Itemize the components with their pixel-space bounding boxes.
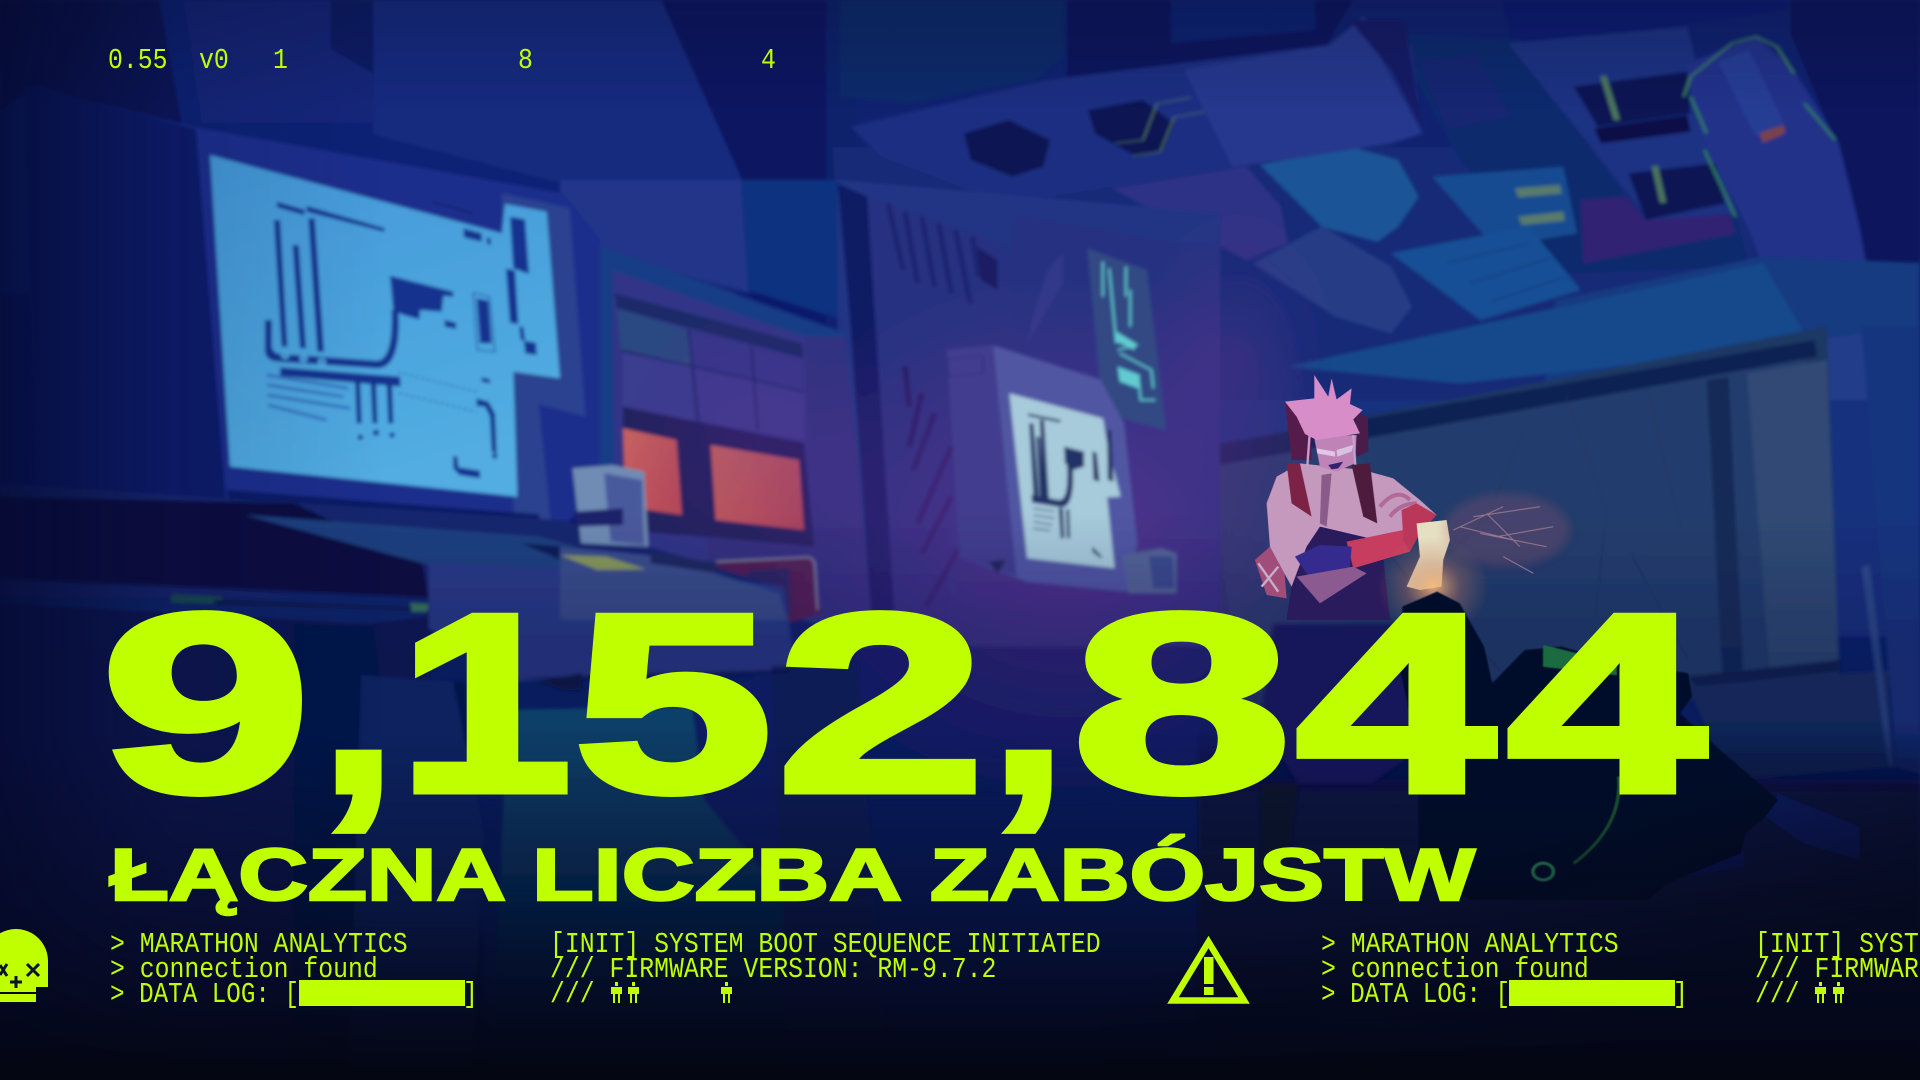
purple haze — [612, 208, 1384, 808]
headline number: , — [990, 561, 1066, 845]
back wall left — [0, 0, 857, 294]
icon: figures — [611, 982, 732, 1003]
top numeric readout: v0 — [199, 44, 229, 77]
terminal log left — [110, 928, 478, 1011]
terminal log right: > MARATHON ANALYTICS — [1321, 928, 1619, 961]
headline number: 5 — [574, 561, 772, 845]
lower scene tone overlay — [0, 514, 1920, 1080]
window — [1190, 327, 1920, 1020]
terminal log right: > DATA LOG: [ — [1321, 978, 1510, 1011]
progress bar — [1509, 980, 1675, 1006]
system boot log: /// — [550, 978, 595, 1011]
character with gauntlet — [1255, 375, 1570, 637]
right wall with beam — [833, 147, 1920, 637]
headline number: 4 — [1507, 561, 1706, 845]
headline number: 8 — [1072, 561, 1292, 845]
system boot log — [550, 928, 1101, 1011]
box beside monitor — [560, 465, 787, 620]
system boot log, clipped at right edge: /// — [1755, 978, 1800, 1011]
icon: warning triangle — [1173, 942, 1244, 1000]
icon: skull — [0, 929, 48, 1002]
system boot log, clipped at right edge — [1755, 928, 1920, 1011]
system boot log: [INIT] SYSTEM BOOT SEQUENCE INITIATED — [550, 928, 1101, 961]
headline number: 9 — [101, 561, 311, 845]
main monitor housing — [0, 86, 784, 624]
headline number: 1 — [398, 561, 572, 845]
character legs — [1261, 624, 1439, 882]
headline number: 2 — [776, 561, 986, 845]
subheading — [110, 835, 1475, 916]
main screen with circuit diagram — [210, 155, 560, 497]
small monitor and holo — [947, 248, 1177, 593]
headline number: 4 — [1296, 561, 1495, 845]
terminal log left: > connection found — [110, 953, 378, 986]
ceiling machinery — [826, 0, 1920, 400]
top numeric readout: 0.55 — [108, 44, 168, 77]
top numeric readout — [108, 44, 776, 77]
icon: figures — [1815, 982, 1844, 1003]
top numeric readout: 1 — [273, 44, 288, 77]
terminal log right: > connection found — [1321, 953, 1589, 986]
fallen figure — [1398, 592, 1859, 900]
terminal log left: ] — [463, 978, 478, 1011]
subheading: ŁĄCZNA — [110, 835, 506, 916]
terminal log left: > DATA LOG: [ — [110, 978, 299, 1011]
subheading: LICZBA — [532, 835, 902, 916]
terminal log right: ] — [1673, 978, 1688, 1011]
top numeric readout: 4 — [761, 44, 776, 77]
progress bar — [299, 980, 465, 1006]
top numeric readout: 8 — [518, 44, 533, 77]
headline number: , — [320, 561, 396, 845]
terminal log left: > MARATHON ANALYTICS — [110, 928, 408, 961]
subheading: ZABÓJSTW — [930, 835, 1475, 916]
console and small box — [0, 497, 888, 1077]
headline number — [101, 561, 1706, 845]
terminal log right — [1321, 928, 1688, 1011]
middle wall, panel and small monitor — [560, 180, 1220, 647]
system boot log: /// FIRMWARE VERSION: RM-9.7.2 — [550, 953, 996, 986]
